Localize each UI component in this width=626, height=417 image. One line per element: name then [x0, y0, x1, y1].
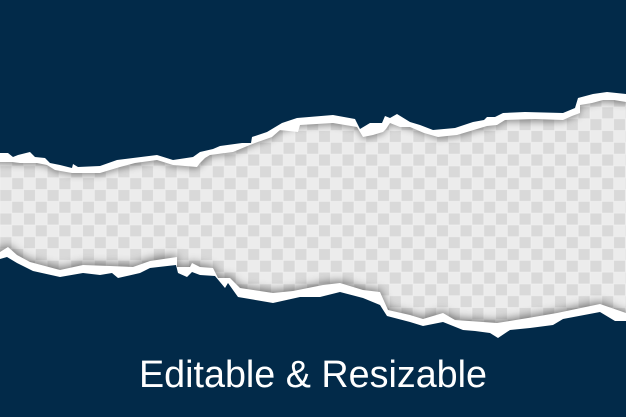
shadow: upper tear	[0, 0, 626, 175]
caption: Editable & Resizable	[139, 354, 487, 396]
navy paper: upper tear	[0, 0, 626, 168]
transparent checkerboard background	[0, 90, 626, 340]
white paper edge: upper tear	[0, 0, 626, 173]
white paper edge: lower tear	[0, 247, 626, 417]
navy paper: lower tear	[0, 257, 626, 417]
shadow: lower tear	[0, 245, 626, 417]
